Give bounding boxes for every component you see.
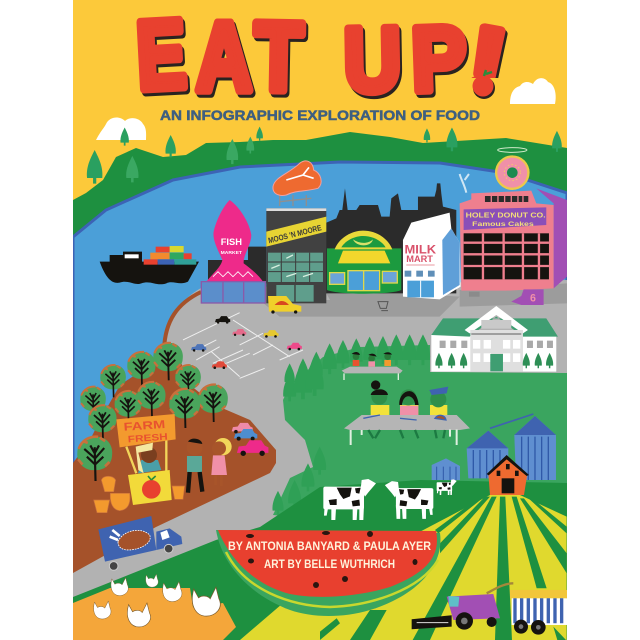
fish market building: FISH — [221, 237, 242, 247]
subtitle: AN INFOGRAPHIC EXPLORATION OF FOOD — [160, 107, 480, 123]
icon: apple — [472, 70, 495, 99]
shopping cart — [378, 302, 388, 311]
milk carton building: MILK — [404, 242, 436, 256]
cloud right — [510, 78, 556, 104]
delivery truck — [511, 289, 544, 305]
chicken yard — [73, 588, 236, 640]
milk carton building: MART — [406, 254, 433, 264]
title: EAT UP! — [136, 16, 508, 100]
grain silos — [432, 414, 556, 480]
shopper with teal shirt — [187, 439, 203, 493]
orchard hill — [73, 347, 276, 573]
farm fresh stand: FARM — [123, 419, 166, 434]
title: EAT UP!: P — [410, 7, 468, 111]
ground shadows — [260, 283, 567, 317]
orchard trees — [77, 343, 228, 481]
title: EAT UP!: P — [412, 10, 470, 114]
dark green meadow — [73, 480, 567, 640]
cargo ship — [100, 246, 199, 284]
parked cars — [191, 316, 302, 369]
near picnic table with children — [344, 380, 470, 445]
grey land and roads — [73, 280, 567, 600]
green grocer building — [327, 231, 401, 294]
cows — [323, 479, 457, 520]
title: EAT UP!: T — [255, 5, 306, 114]
watermelon title slice — [216, 530, 440, 616]
coast edge — [164, 292, 201, 350]
title: EAT UP!: E — [136, 3, 191, 114]
crop rows — [320, 497, 567, 640]
title: EAT UP!: A — [198, 5, 254, 114]
chickens — [94, 574, 220, 627]
red barn — [487, 455, 529, 495]
turkey delivery truck — [98, 516, 182, 570]
city skyline — [325, 183, 456, 293]
butcher shop building — [266, 208, 326, 303]
fish market building — [201, 200, 266, 303]
steak sign — [273, 161, 321, 206]
far picnic table with children — [342, 352, 403, 380]
title: EAT UP!: T — [253, 2, 304, 111]
milk carton building — [403, 213, 461, 299]
cloud left — [96, 118, 146, 140]
donut factory: HOLEY DONUT CO. — [466, 210, 546, 219]
title: EAT UP!: ! — [461, 9, 516, 122]
city scene — [100, 148, 567, 378]
shopper in pink — [211, 438, 232, 475]
illustrator credit: ART BY BELLE WUTHRICH — [264, 559, 395, 571]
farm fresh stand — [116, 414, 176, 505]
orchard and farm stand scene — [77, 343, 268, 570]
authors credit: BY ANTONIA BANYARD & PAULA AYER — [228, 541, 432, 553]
title: EAT UP!: A — [196, 2, 252, 111]
book cover — [73, 0, 570, 640]
title: EAT UP!: U — [343, 10, 402, 112]
donut factory — [460, 174, 567, 291]
parked cars by stand — [232, 423, 268, 456]
crop field — [240, 495, 567, 640]
hill pine trees — [87, 127, 562, 184]
donut factory: Famous Cakes — [472, 222, 535, 228]
green hills — [73, 132, 567, 235]
baskets of produce — [94, 476, 185, 513]
green field — [273, 345, 567, 520]
farm fresh stand: FRESH — [127, 432, 168, 444]
title: EAT UP!: E — [134, 0, 189, 111]
parking lot lines — [183, 313, 303, 378]
harvest wagon — [510, 590, 570, 635]
combine harvester — [412, 583, 513, 630]
academy building — [431, 306, 558, 372]
pine trees by road — [272, 357, 326, 515]
yellow van — [268, 296, 301, 314]
delivery truck: 6 — [530, 292, 536, 304]
bench — [469, 292, 480, 297]
crop field and farm scene — [240, 352, 570, 640]
giant donut sign — [495, 148, 530, 190]
forest rows — [284, 334, 430, 386]
butcher shop building: MOOS 'N MOORE — [267, 223, 323, 245]
fish market building: MARKET — [221, 250, 242, 256]
title: EAT UP!: ! — [459, 6, 514, 119]
river — [73, 162, 567, 470]
title: EAT UP!: U — [345, 13, 404, 115]
